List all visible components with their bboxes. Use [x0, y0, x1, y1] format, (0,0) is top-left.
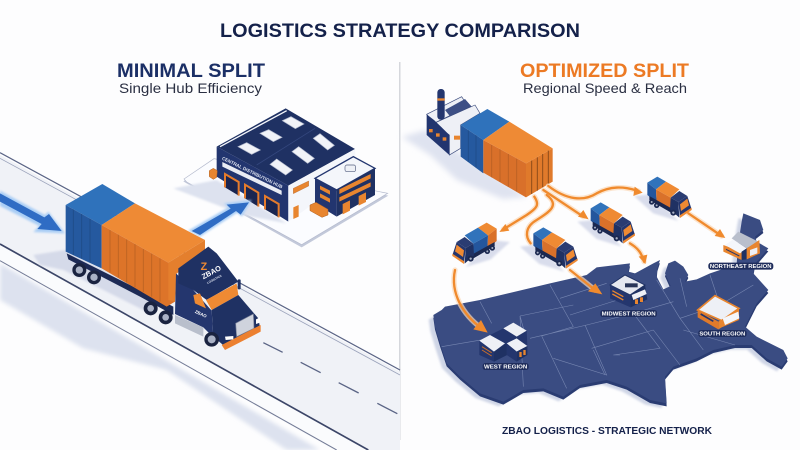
- factory and container shadow: [402, 130, 527, 199]
- cab: ZBAO: [194, 309, 208, 319]
- skylights: [238, 117, 334, 175]
- heading: optimized split: OPTIMIZED SPLIT: [520, 61, 689, 82]
- truck: midwest upper route: [577, 202, 635, 247]
- truck shadow: [33, 250, 160, 313]
- route arrows from container: [499, 186, 725, 264]
- map of the United States: [433, 213, 788, 403]
- icon: incoming blue arrow: [0, 191, 65, 233]
- south region hub: [698, 296, 739, 329]
- label: northeast region: NORTHEAST REGION: [710, 264, 771, 270]
- heading: minimal split: MINIMAL SPLIT: [117, 61, 265, 82]
- panel: US map: [429, 213, 788, 408]
- state borders: [442, 275, 753, 388]
- panel: optimized split upper scene: [452, 109, 725, 272]
- warehouse: [173, 108, 375, 223]
- route arrows to regions: [454, 270, 602, 333]
- truck logo: Z: [201, 261, 208, 273]
- factory: [427, 89, 480, 155]
- panel: minimal split scene: [0, 108, 400, 450]
- crates: [209, 168, 328, 217]
- truck: [66, 184, 261, 350]
- midwest region hub: [610, 275, 647, 307]
- heading: optimized split: [520, 61, 689, 96]
- cab: ZBAO: [200, 263, 223, 281]
- truck: west route: [452, 223, 510, 267]
- cab: [175, 247, 261, 350]
- cab: LOGISTICS: [206, 274, 222, 285]
- container: [66, 184, 205, 307]
- label: south region: SOUTH REGION: [699, 331, 745, 337]
- warehouse roof: [217, 108, 355, 186]
- large container: [461, 109, 553, 197]
- label: midwest region: MIDWEST REGION: [602, 311, 656, 317]
- trailer chassis and wheels: [67, 253, 173, 324]
- footer caption: ZBAO LOGISTICS - STRATEGIC NETWORK: [502, 425, 712, 437]
- label: west region: WEST REGION: [484, 364, 527, 370]
- warehouse sign: CENTRAL DISTRIBUTION HUB: [221, 156, 284, 190]
- road shadow: [0, 263, 320, 450]
- divider line: [399, 62, 400, 440]
- northeast region hub: [723, 232, 760, 260]
- truck: midwest lower route: [520, 227, 578, 272]
- heading: optimized split: Regional Speed & Reach: [523, 80, 687, 96]
- truck: northeast route: [634, 177, 692, 221]
- west region hub: [479, 323, 527, 362]
- icon: blue arrow to hub: [188, 200, 252, 237]
- annex: [315, 157, 375, 190]
- title: LOGISTICS STRATEGY COMPARISON: [220, 21, 580, 42]
- map extrusion: [433, 216, 788, 406]
- loading doors: [225, 174, 279, 217]
- warehouse platform: [183, 159, 388, 247]
- warehouse side wall: [288, 149, 356, 222]
- map shadow: [429, 218, 783, 408]
- road: [0, 153, 400, 450]
- heading: minimal split: Single Hub Efficiency: [119, 80, 262, 96]
- heading: minimal split: [117, 61, 265, 96]
- warehouse front wall: [217, 147, 288, 222]
